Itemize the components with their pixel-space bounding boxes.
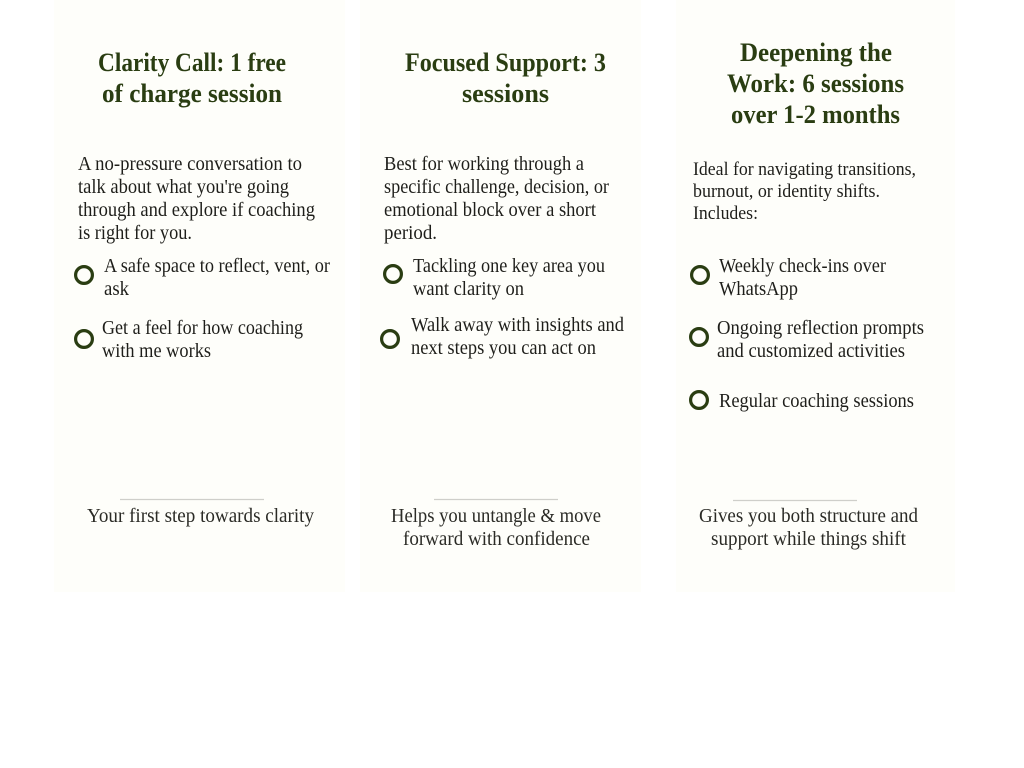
bullet: insights and next steps (382, 315, 624, 359)
bullet: insights and next steps: next steps you can act on (411, 338, 596, 359)
description: deepening the work: Includes: (693, 204, 758, 224)
bullet: safe space: ask (104, 279, 129, 300)
closing line: focused support (391, 506, 601, 550)
panel: deepening the work (676, 0, 955, 592)
heading: clarity call: of charge session (102, 79, 283, 108)
description: focused support: Best for working through a (384, 154, 584, 175)
heading: deepening the work: Deepening the (740, 38, 892, 67)
heading: clarity call: Clarity Call: 1 free (98, 48, 286, 77)
bullet: feel for coaching: Get a feel for how coaching (102, 318, 303, 339)
heading: clarity call (98, 48, 286, 108)
bullet: weekly check-ins: WhatsApp (719, 279, 798, 300)
heading: focused support: sessions (462, 79, 549, 108)
bullet: weekly check-ins: Weekly check-ins over (719, 256, 886, 277)
bullet: reflection prompts: and customized activities (717, 341, 905, 362)
description: focused support: specific challenge, decision, or (384, 177, 609, 198)
closing line: deepening the work: Gives you both structure and (699, 506, 918, 527)
description: clarity call: A no-pressure conversation to (78, 154, 302, 175)
description: clarity call: is right for you. (78, 223, 192, 244)
bullet: one key area: want clarity on (413, 279, 524, 300)
panel: clarity call (54, 0, 345, 592)
bullet: insights and next steps: Walk away with insights and (411, 315, 624, 336)
closing line: focused support: Helps you untangle & move (391, 506, 601, 527)
heading: deepening the work: over 1-2 months (731, 100, 900, 129)
description: focused support (384, 154, 609, 244)
bullet: feel for coaching (76, 318, 303, 362)
description: deepening the work: burnout, or identity shifts. (693, 182, 880, 202)
heading: focused support: Focused Support: 3 (405, 48, 606, 77)
bullet: regular sessions: Regular coaching sessions (719, 391, 914, 412)
description: deepening the work: Ideal for navigating transitions, (693, 160, 916, 180)
closing line: clarity call: Your first step towards clarity (87, 506, 314, 527)
description: focused support: emotional block over a short (384, 200, 597, 221)
bullet: reflection prompts: Ongoing reflection prompts (717, 318, 924, 339)
bullet: safe space: A safe space to reflect, vent, or (104, 256, 330, 277)
description: clarity call: talk about what you're going (78, 177, 289, 198)
heading: focused support (405, 48, 606, 108)
bullet: weekly check-ins (692, 256, 886, 300)
bullet: one key area (385, 256, 605, 300)
panel: focused support (360, 0, 641, 592)
closing line: deepening the work (699, 506, 918, 550)
closing line: focused support: forward with confidence (403, 529, 590, 550)
bullet: feel for coaching: with me works (102, 341, 211, 362)
description: clarity call (78, 154, 315, 244)
bullet: reflection prompts (691, 318, 924, 362)
description: focused support: period. (384, 223, 437, 244)
heading: deepening the work (727, 38, 904, 129)
description: deepening the work (693, 160, 916, 224)
bullet: safe space (76, 256, 330, 300)
description: clarity call: through and explore if coaching (78, 200, 315, 221)
closing line: deepening the work: support while things shift (711, 529, 907, 550)
heading: deepening the work: Work: 6 sessions (727, 69, 904, 98)
bullet: one key area: Tackling one key area you (413, 256, 605, 277)
